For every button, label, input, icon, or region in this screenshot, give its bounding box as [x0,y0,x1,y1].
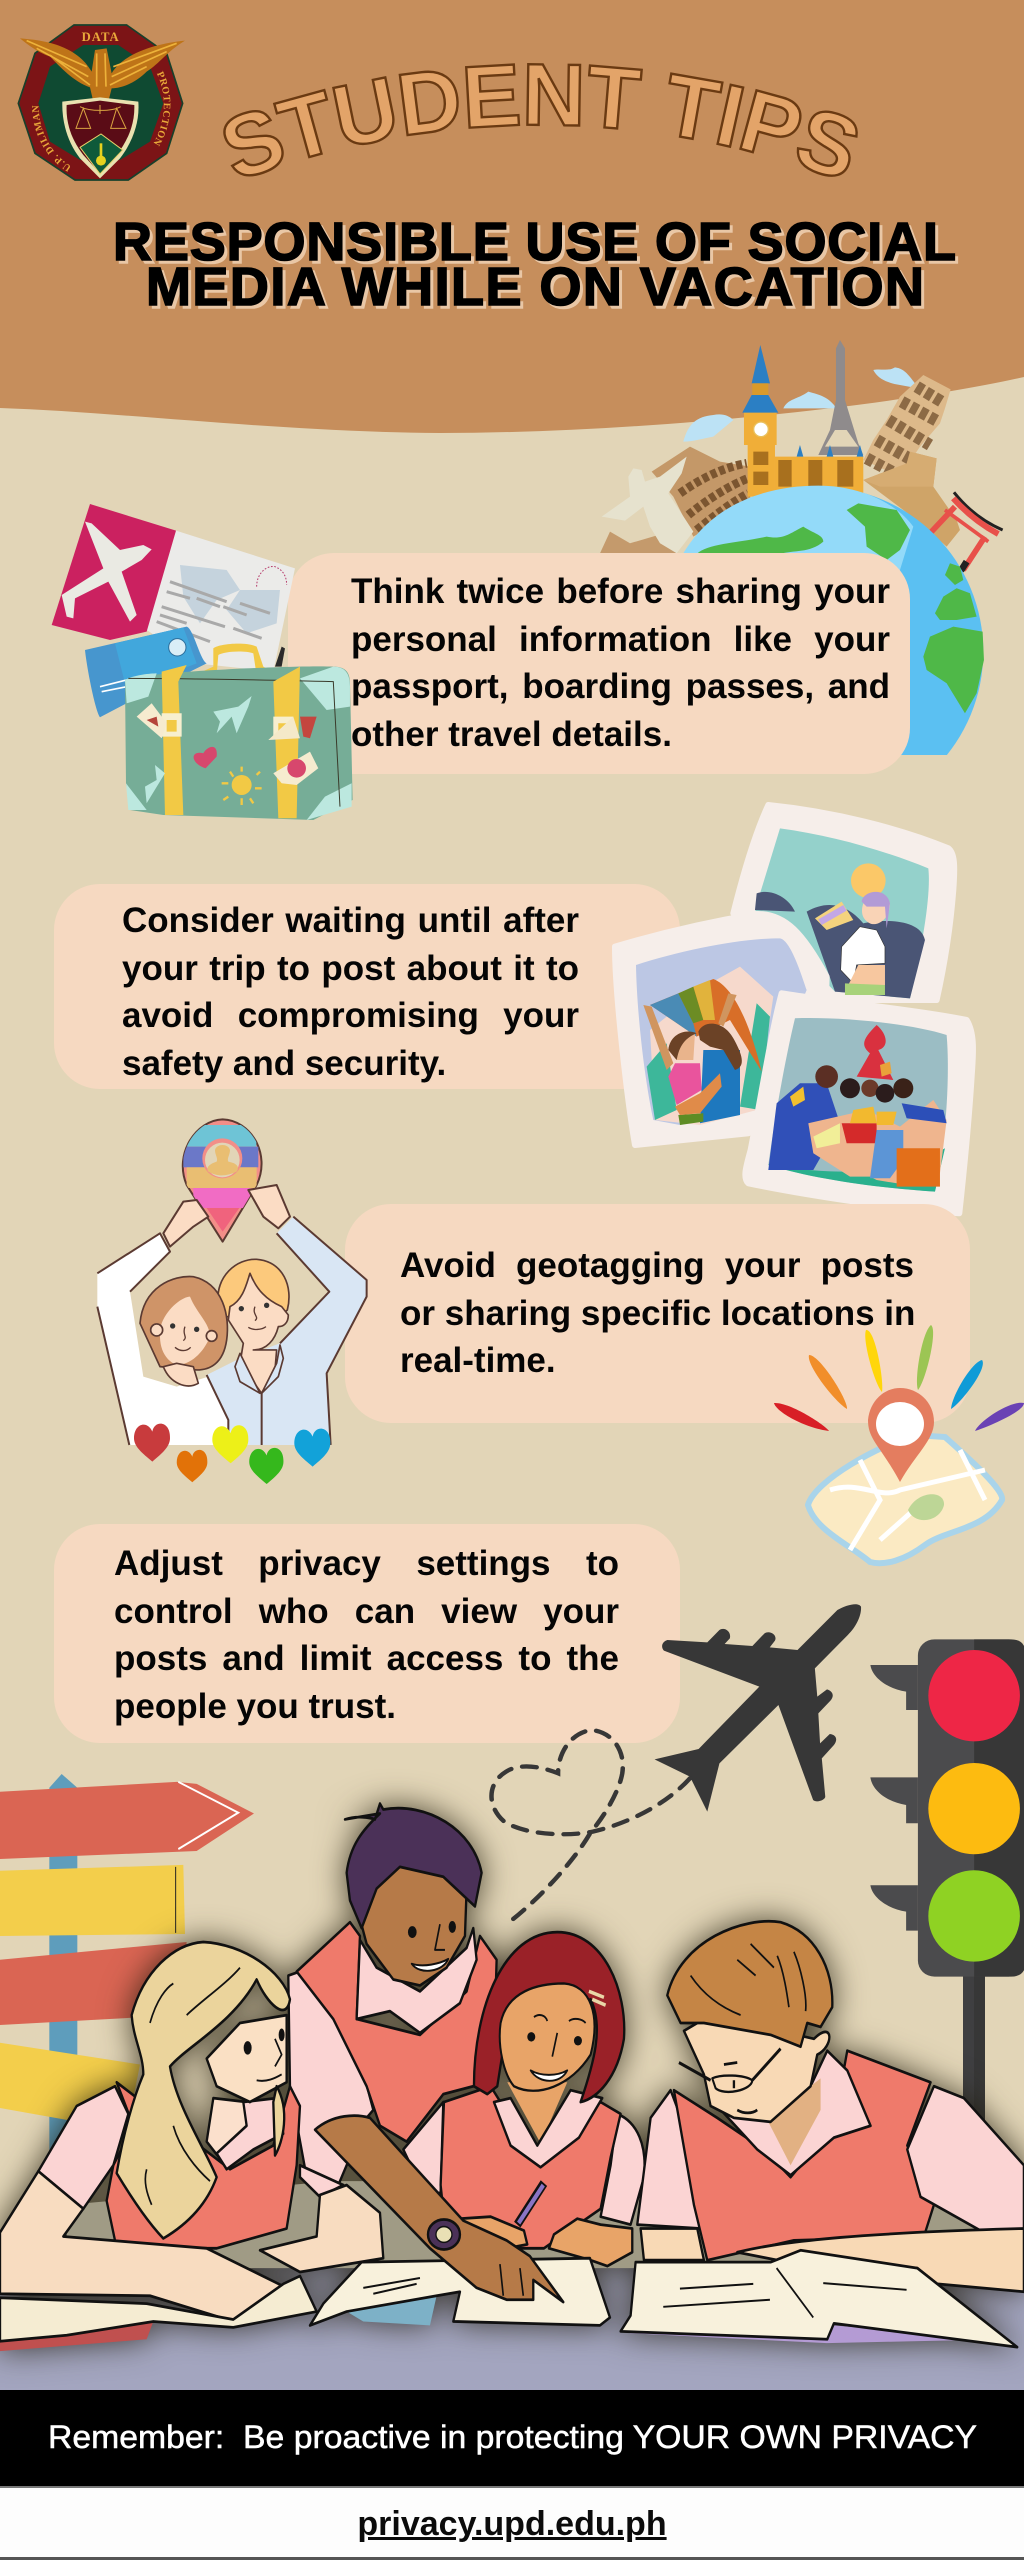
text: tip 2 [122,901,579,1083]
text: tip 2: Consider waiting until after [122,901,579,940]
panel: tip 2 bubble [54,884,680,1089]
icon: boarding pass, passport and suitcase [52,504,353,820]
icon: UP Diliman data protection seal: PROTECTION [154,70,170,146]
text: tip 3: or sharing specific locations in [400,1294,915,1333]
text: tip 1 [351,572,890,754]
footer banner: reminder [0,2390,1024,2486]
heading: responsible use of social media: MEDIA WHILE ON VACATION [146,257,924,317]
heading: responsible use of social media [113,212,956,317]
icon: UP Diliman data protection seal: U.P. DILIMAN [32,106,70,172]
text: tip 4: people you trust. [114,1687,396,1726]
header banner [0,0,1024,433]
student: red hair girl [403,1932,645,2266]
icon: map with location pin and rainbow rays [774,1325,1024,1563]
parliament [775,457,863,497]
text: tip 1: Think twice before sharing your [351,572,890,611]
icon: traffic light [870,1639,1024,2240]
text: tip 1: personal information like your [351,620,890,659]
open books [0,2250,1017,2351]
icon: couple holding location pin with hearts [97,1119,367,1484]
photo: pride group [745,993,973,1213]
heading: responsible use of social media: RESPONSIBLE USE OF SOCIAL [113,212,956,272]
panel: tip 4 bubble [54,1524,680,1743]
torii [930,492,1003,571]
icon: directional signpost [0,1774,254,2242]
illustration: four students reading at a table [0,1804,1024,2351]
student: blonde girl [0,1942,383,2321]
text: tip 4: posts and limit access to the [114,1639,619,1678]
text: tip 1: passport, boarding passes, and [351,667,890,706]
colosseum [652,447,750,537]
text: tip 3 [400,1246,915,1380]
text: tip 2: avoid compromising your [122,996,579,1035]
text: tip 4: Adjust privacy settings to [114,1544,619,1583]
text: tip 3: real-time. [400,1341,556,1380]
photo: couple with rainbow flag [615,914,827,1145]
icon: globe with world landmarks [600,340,1004,755]
text: tip 4 [114,1544,619,1726]
footer: website link: privacy.upd.edu.ph [357,2505,667,2543]
hands and pen [461,2183,632,2266]
table [0,2266,1024,2390]
pointing arm [315,2116,563,2302]
icon: three travel photo prints [615,805,973,1213]
body gaps [67,2181,987,2268]
panel: tip 3 bubble [345,1204,970,1423]
earth [684,486,984,755]
icon: UP Diliman data protection seal [18,24,185,181]
text: tip 2: safety and security. [122,1044,446,1083]
big ben [744,412,777,497]
icon: airplane silhouette with dashed heart trail [491,1604,861,1923]
text: tip 4: control who can view your [114,1592,619,1631]
icon: UP Diliman data protection seal: DATA [82,30,120,44]
text: tip 2: your trip to post about it to [122,949,579,988]
student: boy with glasses [637,1921,1024,2292]
text: tip 1: other travel details. [351,715,672,754]
footer: website link [0,2486,1024,2557]
student: back boy [288,1804,497,2197]
sphinx [863,452,960,547]
pisa [863,375,951,477]
footer banner: reminder: Remember: Be proactive in protecting YOUR OWN PRIVACY [48,2419,977,2455]
text: tip 3: Avoid geotagging your posts [400,1246,914,1285]
title: student tips arc: STUDENT TIPS [223,63,858,177]
hearts [134,1424,330,1484]
location pin [178,1119,262,1242]
photo: girl with flag [733,805,954,1000]
panel: tip 1 bubble [288,553,910,774]
eiffel [818,340,863,455]
